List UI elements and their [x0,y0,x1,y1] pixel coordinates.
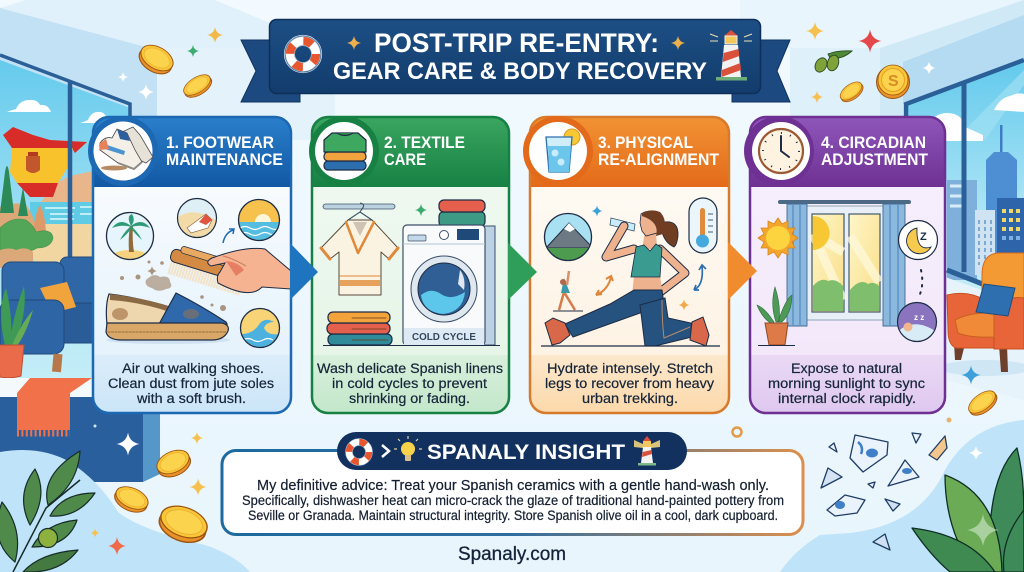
panel 4 description: Expose to natural [791,361,902,376]
arrow: panel 1 to 2 [290,243,318,300]
icon: lighthouse small [634,436,660,466]
panel 2 footer [312,355,509,413]
panel: circadian adjustment [744,116,945,413]
coin with dollar: S [888,73,899,90]
panel 3 description: Hydrate intensely. Stretch [547,361,713,376]
icon: sea sunset circle [238,200,280,242]
icon: light bulb [394,436,422,461]
panel 2 header [312,117,509,187]
chevron [382,445,389,457]
panel 1 description: Clean dust from jute soles [108,376,274,391]
illustration: sunny window [804,206,886,320]
decorative coins [111,40,1001,548]
insight text: Seville or Granada. Maintain structural integrity. Store Spanish olive oil in a cool, dark cupboard. [248,508,778,523]
panel 2 description: Wash delicate Spanish linens [317,361,503,376]
panel 4 header [750,117,945,187]
ribbon tails [241,40,790,102]
panel 3 footer [530,355,729,413]
icon: washing machine [403,225,495,345]
right window frame [906,60,1024,122]
icon: lifebuoy small [349,442,369,462]
title banner [241,20,790,102]
panel 4 footer [750,355,945,413]
left window scene [0,50,135,385]
icon: sun [758,218,798,258]
curtains [787,204,905,326]
panel 1 heading [166,134,283,169]
panel 1 footer [93,355,291,413]
floor [0,354,100,380]
panel 2 heading: 2. TEXTILE [384,134,465,152]
title text [333,28,707,85]
machine label: COLD CYCLE [412,331,476,343]
window frame [0,55,130,117]
bottom-right hill [780,420,1024,572]
panel: physical re-alignment [523,116,729,413]
icon: mountain circle [544,214,593,262]
panel 2 badge [309,116,379,186]
icon: stretching figure [553,271,583,311]
panel 4 heading: ADJUSTMENT [821,151,928,169]
panel: textile care [309,116,509,413]
bottom-left hill [0,450,250,572]
panel 2 description [317,361,503,406]
pill title: SPANALY INSIGHT [427,440,625,464]
icon: water glass with lemon [546,129,580,172]
panel 1 heading: 1. FOOTWEAR [166,134,274,152]
panel 3 heading: RE-ALIGNMENT [598,151,719,169]
icon: plus signs [592,206,690,310]
panel 2 heading [384,134,465,169]
icon: lighthouse [710,30,752,80]
insight text: Specifically, dishwasher heat can micro-crack the glaze of traditional hand-painted pottery from [242,493,784,508]
icon: moon circle: Z [920,231,927,243]
icon: thermometer [689,198,717,253]
panel: footwear maintenance [88,116,291,413]
insight text [242,478,784,523]
room background right [740,0,1024,400]
right window scene [908,62,1024,290]
panel 3 header [530,117,729,187]
panel 1 header [93,117,291,187]
title star left [347,36,361,50]
side table with runner [0,378,160,482]
panel 4 outline [750,117,945,413]
panel 2 body [312,117,509,413]
panel 3 heading: 3. PHYSICAL [598,134,693,152]
icon: sparkle green [415,204,427,216]
panel 1 heading: MAINTENANCE [166,151,283,169]
panel 1 outline [93,117,291,413]
sofa [0,257,102,372]
icon: clock [759,129,803,173]
icon: clothes rail and hanger [323,203,395,220]
arrow: panel 2 to 3 [508,243,537,300]
dust particles [120,260,226,311]
insight text: My definitive advice: Treat your Spanish ceramics with a gentle hand-wash only. [257,478,769,494]
icon: towel stack on machine [439,200,485,226]
panel 4 heading: 4. CIRCADIAN [821,134,926,152]
icon: stretch arrows [596,265,706,295]
title text: POST-TRIP RE-ENTRY: [374,28,659,58]
panel 1 description: Air out walking shoes. [122,361,264,376]
insight box [222,432,803,534]
panel 1 badge [88,116,158,186]
insight pill [337,432,687,470]
icon: brush and hand [167,243,291,293]
broken ceramic shards [821,433,947,550]
panel 4 body [750,117,945,413]
panel 1 description [108,361,274,406]
panel 3 description: urban trekking. [582,391,678,406]
panel 1 description: with a soft brush. [136,391,246,406]
icon: wave circle [240,308,280,350]
panel 4 description: morning sunlight to sync [768,376,925,391]
icon: potted plant [757,287,795,346]
sleep dots [920,270,922,294]
icon: sleep circle [897,302,938,345]
title star right [671,36,685,50]
panel 1 body [93,117,291,413]
icon: sleep circle: z z [914,313,924,322]
panel 3 body [530,117,729,413]
illustration: woman lunging and drinking [545,210,709,346]
curtain rod [780,200,909,204]
icon: sneakers [100,127,153,170]
panel 2 description: in cold cycles to prevent [332,376,487,391]
icon: folded clothes [324,133,366,170]
icon: embroidered shirt [321,220,398,295]
icon: folded textiles stack [327,312,392,345]
potted plant [0,286,33,378]
title text: GEAR CARE & BODY RECOVERY [333,58,707,85]
icon: small arrow [223,229,234,243]
panel 3 badge [523,116,593,186]
panel 3 description: legs to recover from heavy [545,376,714,391]
icon: lifebuoy [284,35,322,73]
panel 4 heading [821,134,928,169]
large leaves bottom right [912,448,1024,572]
panel 3 outline [530,117,729,413]
panel 4 description: internal clock rapidly. [778,391,916,406]
coin with dollar [876,65,910,98]
Spain flag map [3,127,87,197]
arrow: panel 3 to 4 [728,242,757,300]
panel 3 description [545,361,714,406]
icon: palm circle [106,212,154,266]
panel 2 heading: CARE [384,151,426,169]
panel 4 description [768,361,925,406]
banner body [270,20,760,94]
footer site name: Spanaly.com [458,544,566,565]
panel 4 badge [744,116,814,186]
icon: moon circle [898,220,938,260]
icon: beach shoe circle [176,198,218,240]
panel 2 outline [312,117,509,413]
icon: olive sprig top right [813,51,852,74]
panel 2 description: shrinking or fading. [349,391,470,406]
room background left [0,0,335,482]
panel 3 heading [598,134,719,169]
olive branch bottom left [0,451,95,572]
armchair [939,253,1024,376]
icon: espadrille shoe [106,293,230,344]
